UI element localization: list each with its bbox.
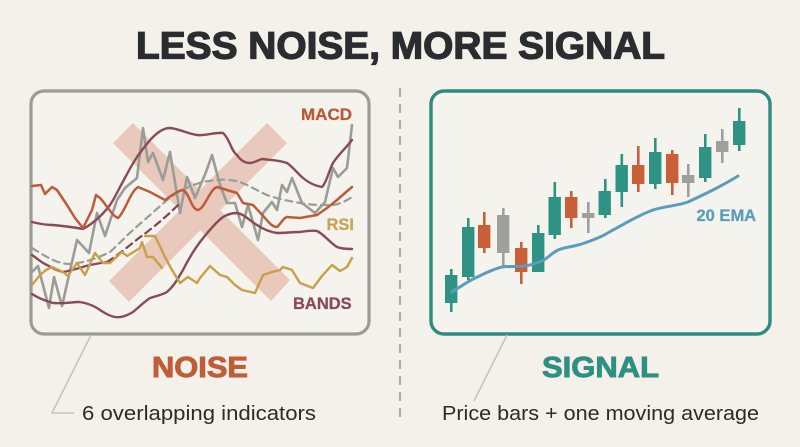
- label: MACD: MACD: [301, 105, 352, 124]
- panel: signal chart: [431, 91, 770, 334]
- moving average line: [452, 176, 738, 292]
- label: BANDS: BANDS: [293, 295, 352, 313]
- leader line: noise: [52, 335, 91, 413]
- heading: noise: NOISE: [152, 352, 248, 384]
- leader line: signal: [474, 335, 507, 401]
- panel: noise chart: [31, 91, 369, 334]
- indicator lines: [32, 125, 352, 317]
- label: 20 EMA: 20 EMA: [696, 207, 756, 225]
- icon: red cross: [109, 123, 290, 302]
- caption: signal: Price bars + one moving average: [442, 403, 759, 425]
- label: RSI: RSI: [326, 216, 354, 234]
- caption: noise: 6 overlapping indicators: [82, 403, 316, 425]
- candlesticks: [445, 108, 745, 312]
- heading: signal: SIGNAL: [542, 352, 659, 384]
- title: LESS NOISE, MORE SIGNAL: [136, 26, 665, 68]
